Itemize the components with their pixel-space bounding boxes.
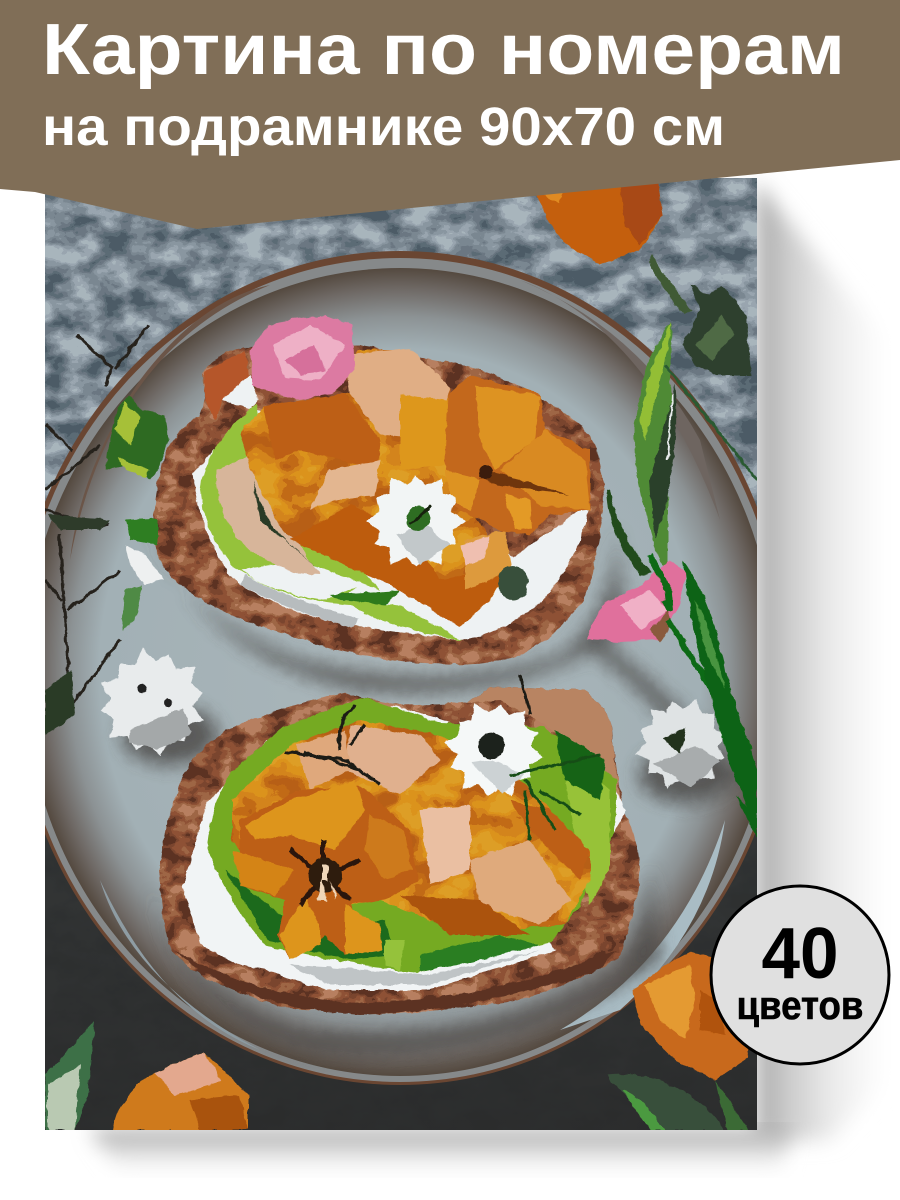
twigs <box>45 325 148 710</box>
tulip top right <box>530 178 757 480</box>
crust bottom toast <box>160 687 640 1015</box>
painting canvas <box>13 178 787 1130</box>
tulip stem and dark leaves <box>648 255 692 316</box>
left daisy <box>100 648 204 756</box>
tall leaf <box>634 322 672 570</box>
right stems and pink flower <box>586 322 757 838</box>
thin dark leaf <box>608 490 650 575</box>
plate shadows around toasts <box>122 520 745 1053</box>
right daisy <box>635 700 724 789</box>
leaf cluster upper <box>105 395 168 480</box>
crust top toast <box>153 345 603 665</box>
plate <box>13 251 787 1085</box>
side daisies <box>83 636 738 797</box>
green stem <box>650 555 750 750</box>
pink flower right <box>586 560 686 642</box>
tulip right <box>632 952 750 1080</box>
corner leaf <box>45 1022 95 1130</box>
tulip lower left <box>113 1052 248 1130</box>
title: Картина по номерам <box>42 10 845 90</box>
white daisy bottom toast <box>444 703 544 796</box>
toast top <box>153 315 603 665</box>
badge: 40 colours: цветов <box>736 984 864 1028</box>
cream bottom toast <box>183 740 557 990</box>
left twigs and leaves <box>45 325 168 735</box>
avocado top toast <box>200 403 462 640</box>
white daisy top toast <box>366 475 466 567</box>
bottom tulips <box>45 952 750 1130</box>
lower leaf <box>683 560 757 830</box>
pink flower top toast <box>250 315 355 400</box>
cream top toast <box>193 375 590 640</box>
top banner <box>0 0 900 229</box>
dark table lower area <box>45 829 757 1130</box>
olive spot <box>498 566 528 600</box>
orange flower top toast <box>445 375 590 535</box>
canvas shadow <box>90 182 885 1170</box>
badge: 40 colours <box>711 886 889 1064</box>
avocado bottom toast <box>207 697 617 973</box>
badge: 40 colours: 40 <box>762 914 838 994</box>
salmon top toast <box>240 350 510 627</box>
leaf and buds lower <box>125 518 158 545</box>
toast bottom <box>160 675 640 1015</box>
dill sprigs <box>284 675 600 840</box>
subtitle: на подрамнике 90х70 см <box>42 97 725 157</box>
painting background texture <box>45 178 757 872</box>
orange flower bottom toast <box>240 785 418 960</box>
salmon bottom toast <box>232 720 590 930</box>
